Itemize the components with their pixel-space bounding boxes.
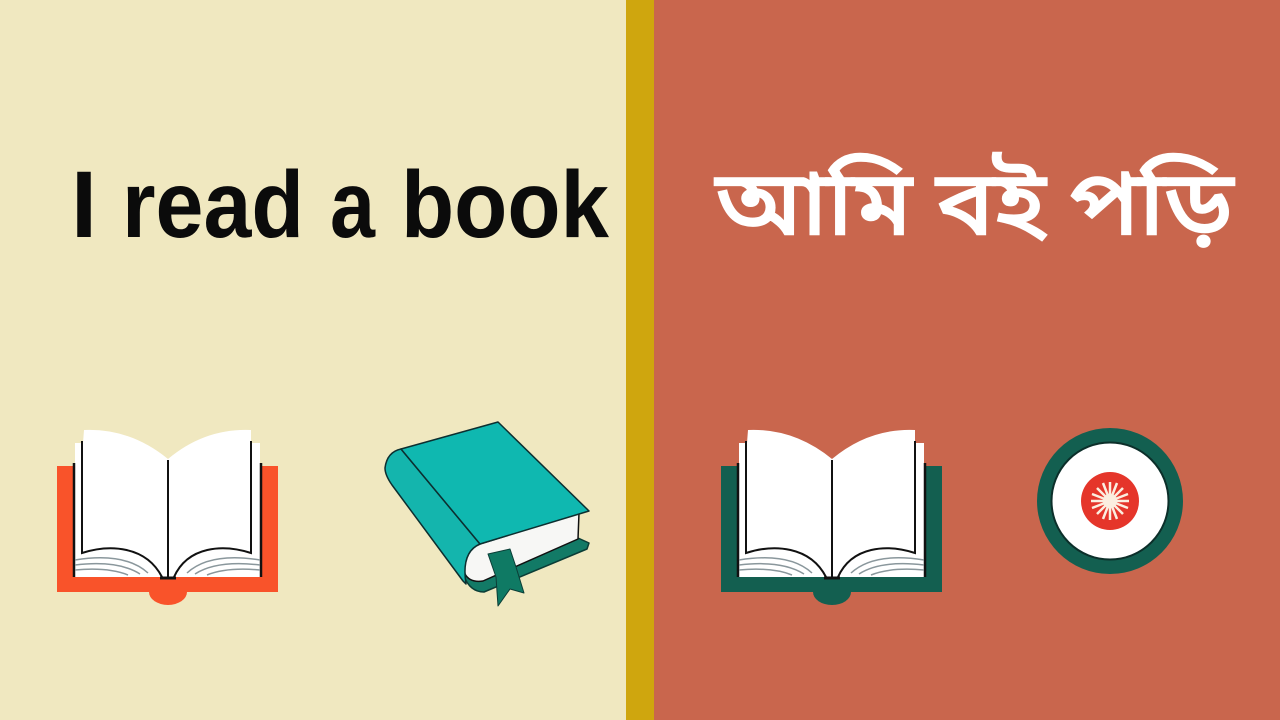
heading: English sentence: a [330,152,376,258]
heading: English sentence: book [401,152,609,258]
panel: English side [0,0,626,720]
panel: Bengali side [654,0,1280,720]
heading: English sentence [71,152,609,258]
centre divider [626,0,654,720]
icon: roundel with sunburst [1037,428,1183,574]
heading: Bengali sentence: আমি বই পড়ি [715,153,1235,271]
icon: closed teal book with bookmark [385,422,589,606]
icon: open book with green cover [721,430,942,605]
heading: English sentence: read [122,152,304,258]
icon: open book with orange cover [57,430,278,605]
heading: English sentence: I [71,152,97,258]
